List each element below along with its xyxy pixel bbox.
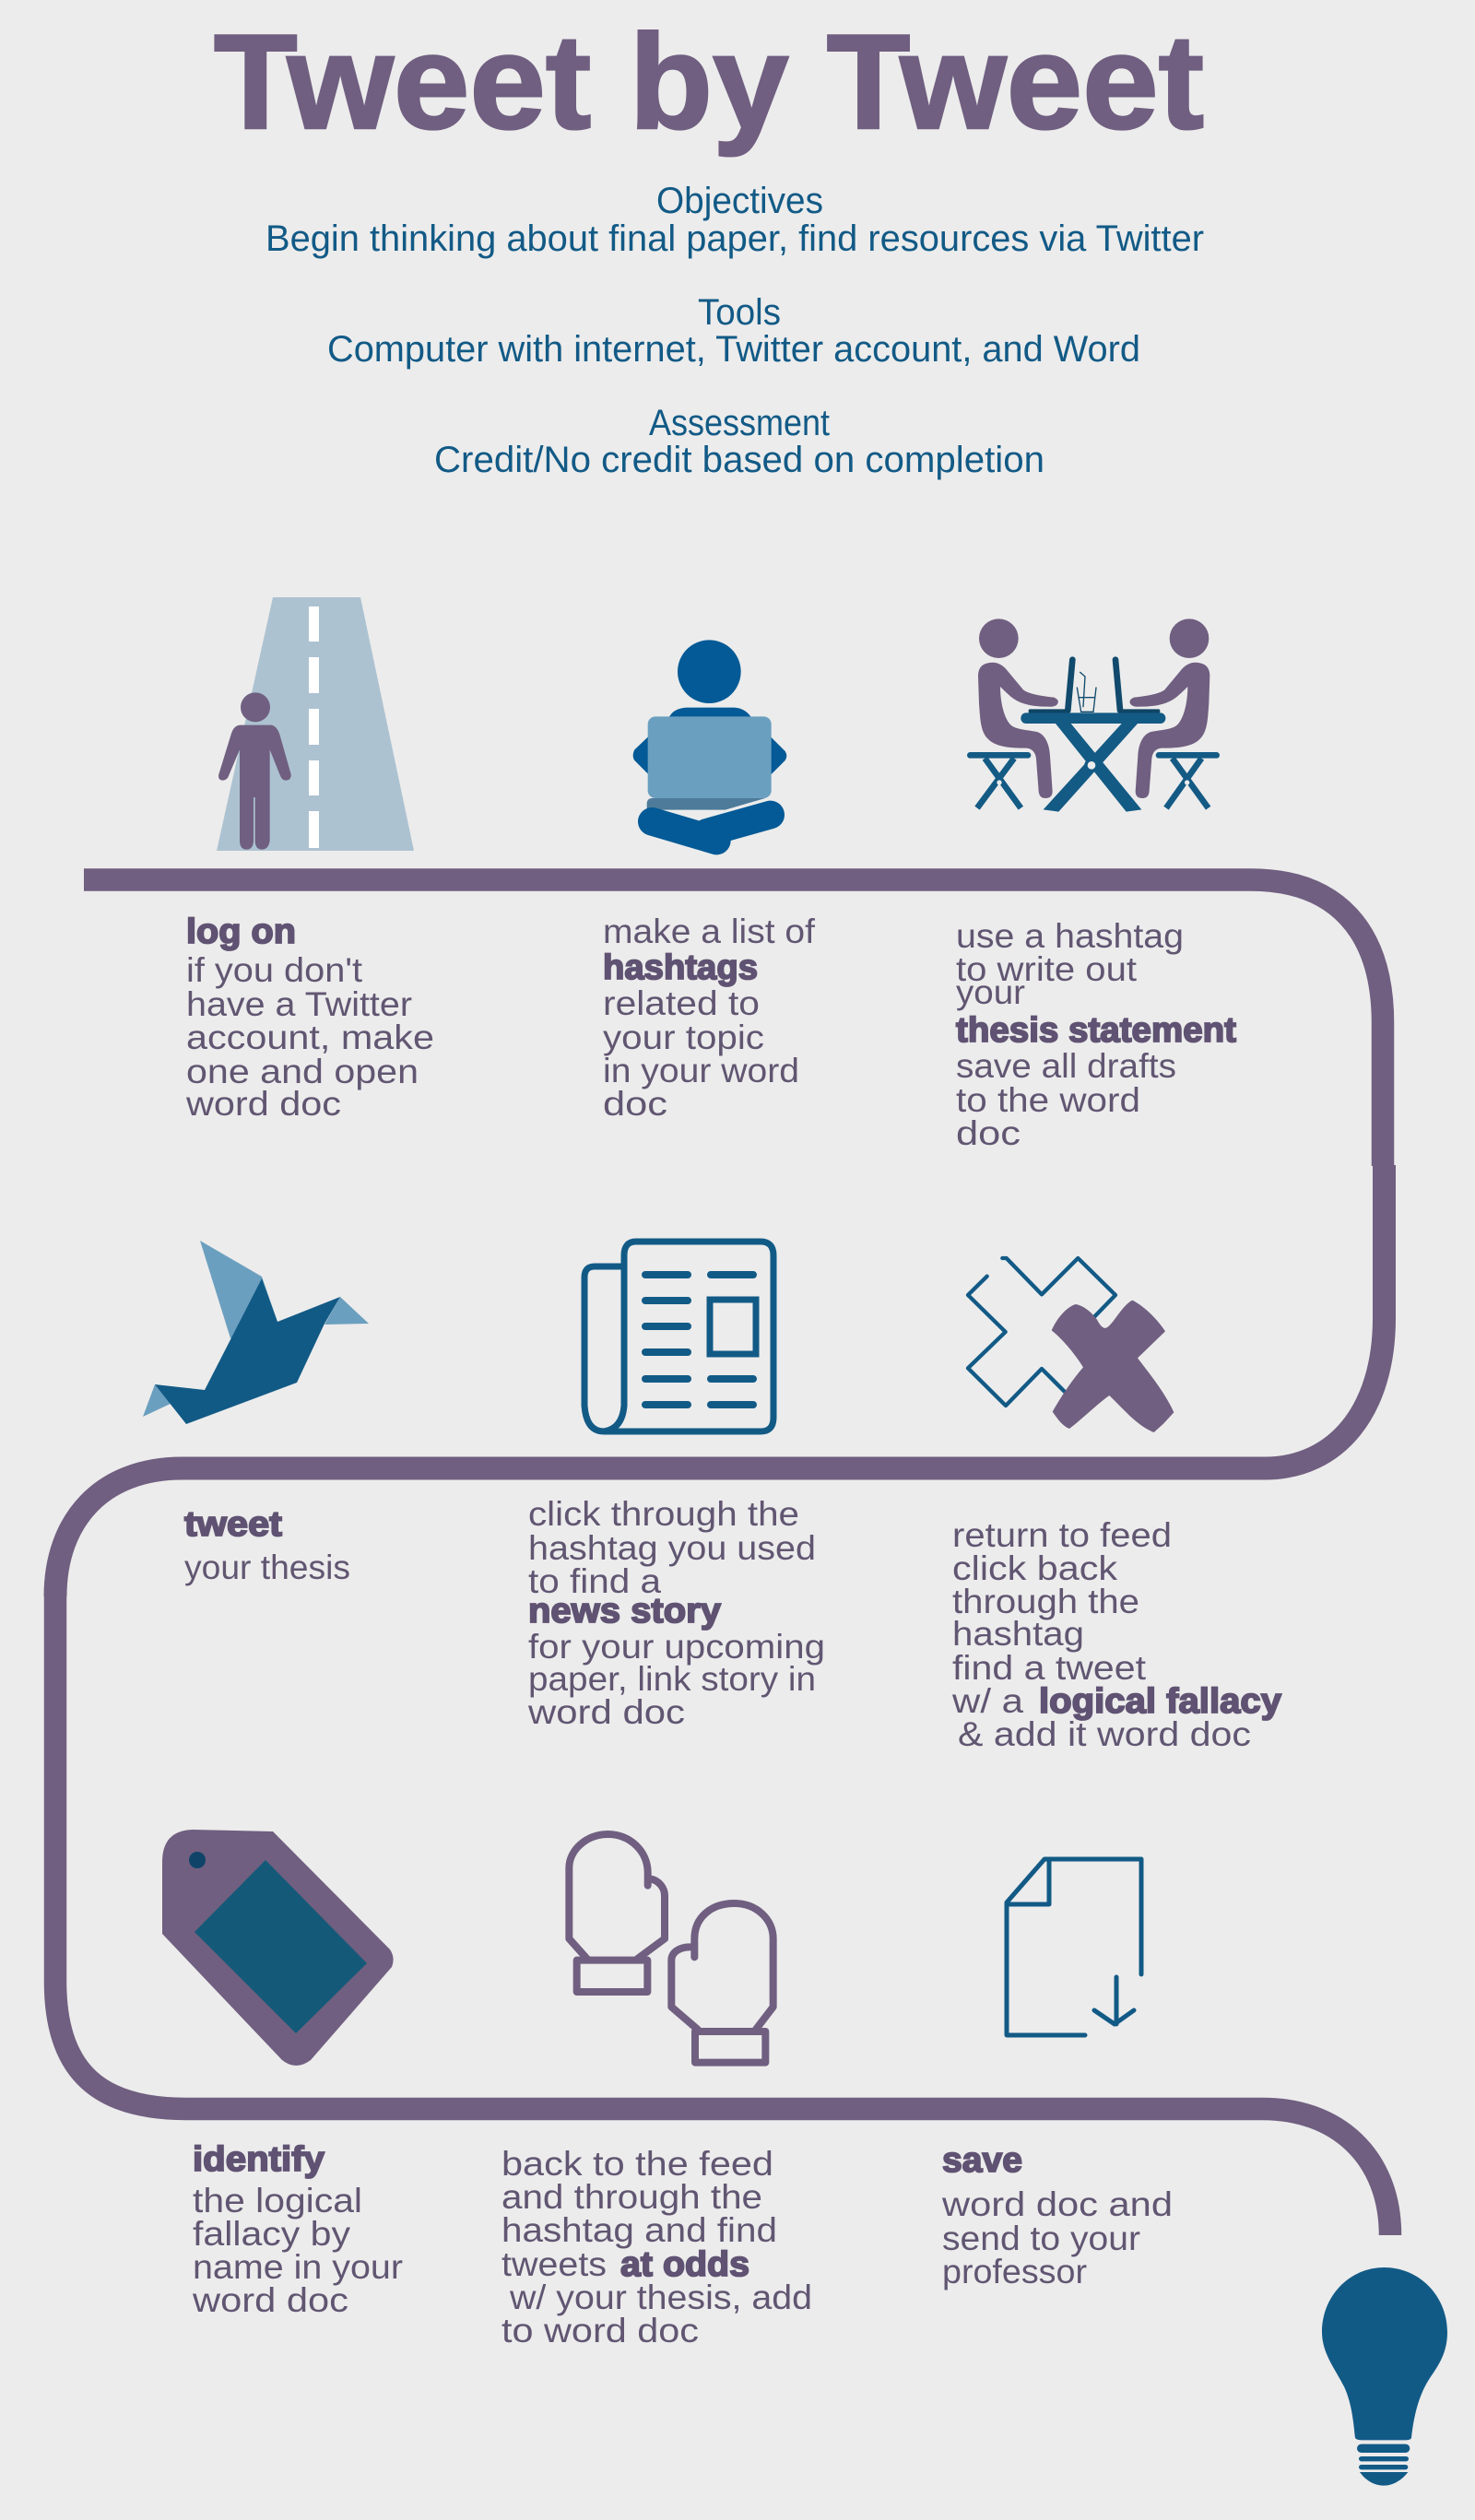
icon: document with download arrow <box>1007 1859 1141 2035</box>
objectives: Objectives <box>656 181 823 221</box>
step 5 text: news story: for your upcoming <box>528 1628 825 1666</box>
step 2 text: hashtags: doc <box>603 1085 667 1123</box>
step 7 text: identify: name in your <box>193 2248 403 2286</box>
tools <box>327 292 1140 370</box>
step 9 text: save: send to your <box>942 2220 1140 2257</box>
step 1 text: log on <box>185 913 434 1123</box>
step 1 text: log on: if you don't <box>186 951 363 989</box>
step 8 text: at odds: and through the <box>502 2178 762 2216</box>
step 3 text: thesis statement <box>956 917 1236 1152</box>
step 6 text: logical fallacy: w/ a <box>951 1682 1023 1720</box>
assessment: Assessment <box>649 403 830 443</box>
intro text: objectives, tools, assessment <box>266 181 1204 480</box>
step 3 text: thesis statement: to the word <box>956 1081 1140 1119</box>
step 5 text: news story: to find a <box>528 1562 661 1600</box>
step 5 text: news story: paper, link story in <box>528 1660 816 1698</box>
tools: Tools <box>698 292 781 333</box>
step 7 text: identify: the logical <box>193 2182 362 2220</box>
step 1 text: log on: have a Twitter <box>186 985 412 1023</box>
step 2 text: hashtags: hashtags <box>603 948 758 987</box>
step 2 text: hashtags: related to <box>603 984 760 1022</box>
step 9 text: save: save <box>942 2141 1022 2180</box>
step 6 text: logical fallacy: through the <box>952 1583 1139 1620</box>
icon: outlined and solid X marks <box>968 1258 1174 1432</box>
assessment <box>434 403 1044 480</box>
step 1 text: log on: word doc <box>185 1085 341 1123</box>
step 2 text: hashtags: make a list of <box>603 913 816 950</box>
step 8 text: at odds: to word doc <box>502 2312 699 2349</box>
icon: origami bird <box>143 1241 369 1424</box>
step 3 text: thesis statement: thesis statement <box>956 1011 1236 1050</box>
step 1 text: log on: account, make <box>186 1019 434 1056</box>
step 5 text: news story: word doc <box>527 1693 685 1731</box>
winding path connecting the steps <box>55 879 1390 2235</box>
icon: light bulb <box>1322 2267 1447 2486</box>
step 6 text: logical fallacy: & add it word doc <box>958 1715 1251 1753</box>
tools: Computer with internet, Twitter account, and Word <box>327 329 1140 370</box>
icon: boxing gloves <box>569 1834 773 2063</box>
step 6 text: logical fallacy: find a tweet <box>952 1649 1147 1687</box>
step 9 text: save: word doc and <box>941 2185 1173 2223</box>
step 2 text: hashtags: your topic <box>603 1019 764 1056</box>
step 5 text: news story: click through the <box>528 1495 799 1533</box>
icon: person beside road <box>217 597 414 851</box>
step 7 text: identify <box>192 2140 403 2319</box>
step 4 text: tweet <box>184 1505 350 1586</box>
step 7 text: identify: identify <box>193 2140 324 2179</box>
step 3 text: thesis statement: to write out <box>956 950 1138 988</box>
step 6 text: logical fallacy: click back <box>952 1549 1118 1587</box>
assessment: Credit/No credit based on completion <box>434 440 1044 480</box>
icon: newspaper <box>584 1242 773 1431</box>
icon: price tag <box>162 1830 394 2066</box>
step 6 text: logical fallacy: hashtag <box>952 1615 1084 1653</box>
step 2 text: hashtags: in your word <box>603 1052 799 1089</box>
step 6 text: logical fallacy: logical fallacy <box>1039 1682 1281 1721</box>
step 3 text: thesis statement: use a hashtag <box>956 917 1184 955</box>
step 5 text: news story: hashtag you used <box>528 1529 816 1567</box>
step 3 text: thesis statement: save all drafts <box>956 1047 1176 1085</box>
step 4 text: tweet: tweet <box>184 1505 282 1544</box>
step 7 text: identify: word doc <box>192 2281 348 2319</box>
step 1 text: log on: one and open <box>186 1053 419 1090</box>
step 8 text: at odds: hashtag and find <box>502 2211 777 2249</box>
step 2 text: hashtags <box>603 913 816 1123</box>
title: Tweet by Tweet <box>214 6 1204 157</box>
objectives: Begin thinking about final paper, find resources via Twitter <box>266 218 1204 259</box>
step 8 text: at odds: tweets <box>502 2245 607 2283</box>
objectives <box>266 181 1204 259</box>
step 4 text: tweet: your thesis <box>184 1549 350 1586</box>
step 5 text: news story: news story <box>528 1592 721 1631</box>
step 3 text: thesis statement: your <box>956 973 1025 1011</box>
step 8 text: at odds: at odds <box>620 2245 749 2284</box>
step 6 text: logical fallacy <box>951 1516 1281 1753</box>
step 1 text: log on: log on <box>186 913 296 951</box>
icon: two people at a table with laptops <box>967 618 1220 812</box>
step 5 text: news story <box>527 1495 825 1731</box>
step 7 text: identify: fallacy by <box>193 2215 351 2253</box>
step 8 text: at odds: back to the feed <box>502 2145 773 2183</box>
step 8 text: at odds: w/ your thesis, add <box>509 2279 812 2316</box>
step 3 text: thesis statement: doc <box>956 1114 1021 1152</box>
step 9 text: save <box>941 2141 1173 2290</box>
step 6 text: logical fallacy: return to feed <box>952 1516 1172 1554</box>
step 8 text: at odds <box>502 2145 812 2349</box>
step 9 text: save: professor <box>942 2253 1087 2290</box>
icon: person sitting with laptop <box>633 640 786 841</box>
